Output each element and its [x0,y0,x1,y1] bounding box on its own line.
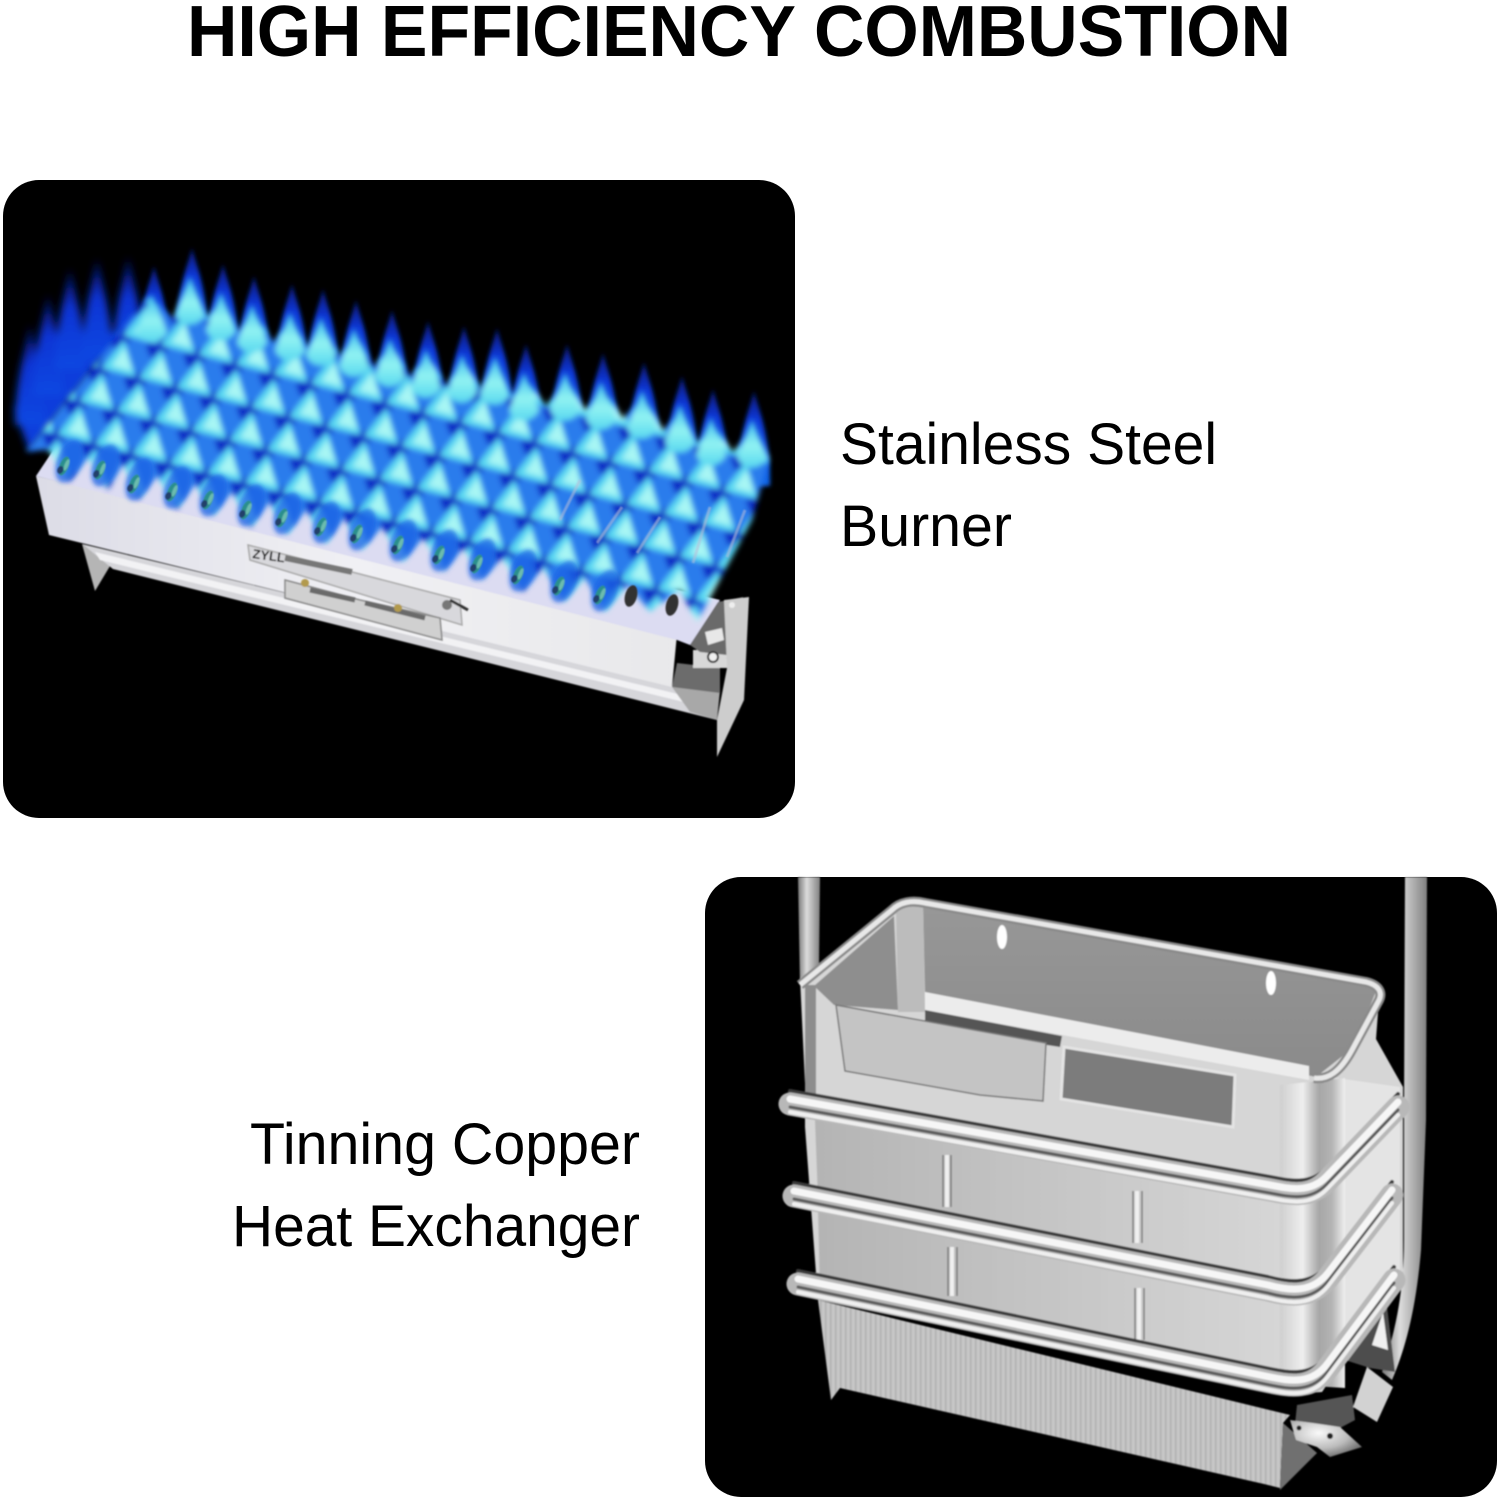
ribs [947,1155,1139,1340]
burner body [36,440,749,757]
blue flames [14,248,770,622]
flame far-left deep blue tongues [14,257,143,452]
exchanger illustration [790,877,1427,1490]
fittings and nuts [1290,1367,1393,1457]
flame streaks [560,480,745,563]
panel background [3,180,795,818]
text: Tinning Copper Heat Exchanger [232,1112,640,1259]
panel background [705,877,1497,1497]
front panel [836,1005,1046,1101]
inner corner strip [896,904,925,1012]
slot holes [997,925,1276,995]
flame grid [26,276,769,622]
top rim [800,902,1380,1078]
vertical pipes [798,877,1427,1380]
flame spikes back layer [136,248,770,486]
dark recess [925,1010,1062,1047]
window [1061,1047,1235,1127]
ledge [925,992,1309,1080]
main body [800,900,1403,1395]
text: Stainless Steel Burner: Burner [840,494,1012,559]
text: Stainless Steel Burner: Stainless Steel [840,412,1217,477]
burner ignition plate [248,545,468,640]
tube two [794,1182,1392,1302]
burner slots [50,437,681,617]
panel: stainless steel burner photo [3,180,795,818]
text: Tinning Copper Heat Exchanger: Heat Exchanger [232,1194,640,1259]
tube one [790,1091,1398,1202]
text: Tinning Copper Heat Exchanger: Tinning Copper [250,1112,640,1177]
panel: heat exchanger photo [705,877,1497,1497]
burner ignition plate: ZYLL [252,546,286,566]
tube three [798,1267,1394,1393]
fin box [818,1300,1317,1490]
inner well back wall [923,904,1378,1077]
inner well left wall [814,916,898,1010]
text: Stainless Steel Burner [840,412,1217,559]
